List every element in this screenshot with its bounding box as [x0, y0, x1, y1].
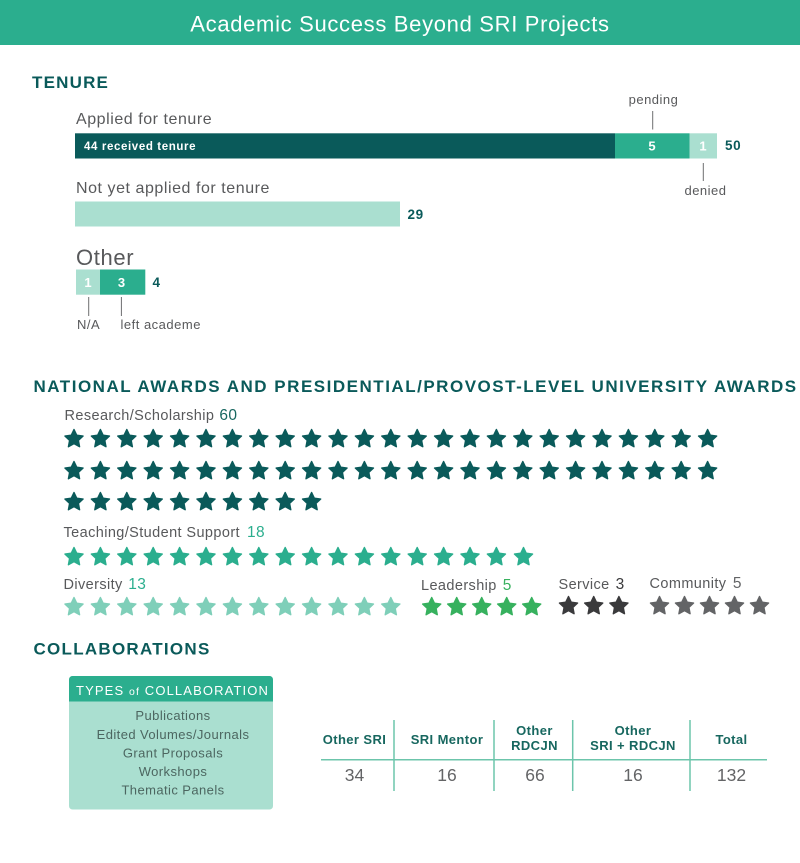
heading: collaborations: COLLABORATIONS	[34, 640, 211, 658]
label: not yet applied: Not yet applied for tenure	[76, 180, 270, 197]
stacked bar: applied for tenure	[75, 133, 717, 158]
table: collaboration counts	[321, 720, 767, 791]
annotation: N/A: N/A	[77, 317, 100, 332]
header banner	[0, 0, 800, 45]
panel: tenure	[32, 73, 741, 332]
header banner: Academic Success Beyond SRI Projects	[190, 12, 610, 36]
card: types of collaboration: TYPES of COLLABORATION	[76, 683, 269, 698]
table: collaboration counts: SRI Mentor	[411, 732, 483, 747]
card: types of collaboration: Publications	[135, 708, 211, 723]
total: 29: 29	[408, 207, 424, 222]
annotation: left academe: left academe	[120, 317, 201, 332]
table: collaboration counts: 16	[437, 765, 457, 785]
table: collaboration counts: Other	[516, 723, 553, 738]
label: research/scholarship 60: Research/Scholarship 60	[64, 407, 237, 424]
stars: leadership	[423, 597, 541, 615]
stars: diversity	[65, 597, 400, 615]
table: collaboration counts: SRI + RDCJN	[590, 738, 676, 753]
total: 50: 50	[725, 138, 741, 153]
stars: teaching/student support	[65, 547, 533, 565]
stacked bar: applied for tenure: 5	[648, 138, 656, 154]
label: applied for tenure: Applied for tenure	[76, 111, 212, 128]
label: other: Other	[76, 245, 134, 270]
table: collaboration counts: Other SRI	[323, 732, 386, 747]
stacked bar: applied for tenure: 44 received tenure	[84, 141, 196, 153]
annotation: denied: denied	[684, 183, 727, 198]
annotation: denied	[684, 163, 727, 198]
annotation: left academe	[120, 297, 201, 332]
stacked bar: applied for tenure: 1	[699, 138, 707, 154]
label: leadership 5: Leadership 5	[421, 577, 512, 594]
total: 4: 4	[152, 275, 161, 290]
heading: awards: NATIONAL AWARDS AND PRESIDENTIAL/PROVOST-LEVEL UNIVERSITY AWARDS	[34, 377, 798, 396]
card: types of collaboration: Workshops	[139, 764, 207, 779]
card: types of collaboration: Thematic Panels	[121, 782, 225, 798]
table: collaboration counts: RDCJN	[511, 738, 558, 753]
table: collaboration counts: 16	[623, 765, 643, 785]
table: collaboration counts: 66	[525, 765, 545, 785]
table: collaboration counts: 34	[345, 765, 364, 785]
annotation: pending	[629, 92, 678, 130]
stacked bar: other: 1	[84, 275, 92, 290]
stars: service	[559, 596, 628, 614]
table: collaboration counts: 132	[717, 765, 746, 785]
stacked bar: other: 3	[118, 275, 125, 290]
annotation: pending: pending	[629, 92, 678, 107]
card: types of collaboration	[69, 676, 273, 810]
stars: community	[650, 596, 769, 614]
card: types of collaboration: Edited Volumes/Journals	[97, 727, 249, 742]
label: teaching/student support 18: Teaching/Student Support 18	[64, 524, 265, 541]
stars: research/scholarship	[65, 429, 717, 510]
label: service 3: Service 3	[558, 576, 625, 593]
table: collaboration counts: Other	[615, 723, 651, 738]
heading: tenure: TENURE	[32, 73, 109, 92]
panel: awards	[34, 377, 798, 615]
table: collaboration counts: Total	[715, 732, 748, 747]
label: community 5: Community 5	[650, 575, 742, 592]
card: types of collaboration: Grant Proposals	[123, 746, 223, 760]
panel: collaborations	[34, 640, 767, 810]
bar: not yet applied	[75, 202, 400, 226]
stacked bar: other	[76, 270, 145, 295]
label: diversity 13: Diversity 13	[64, 576, 146, 593]
annotation: N/A	[77, 297, 100, 332]
